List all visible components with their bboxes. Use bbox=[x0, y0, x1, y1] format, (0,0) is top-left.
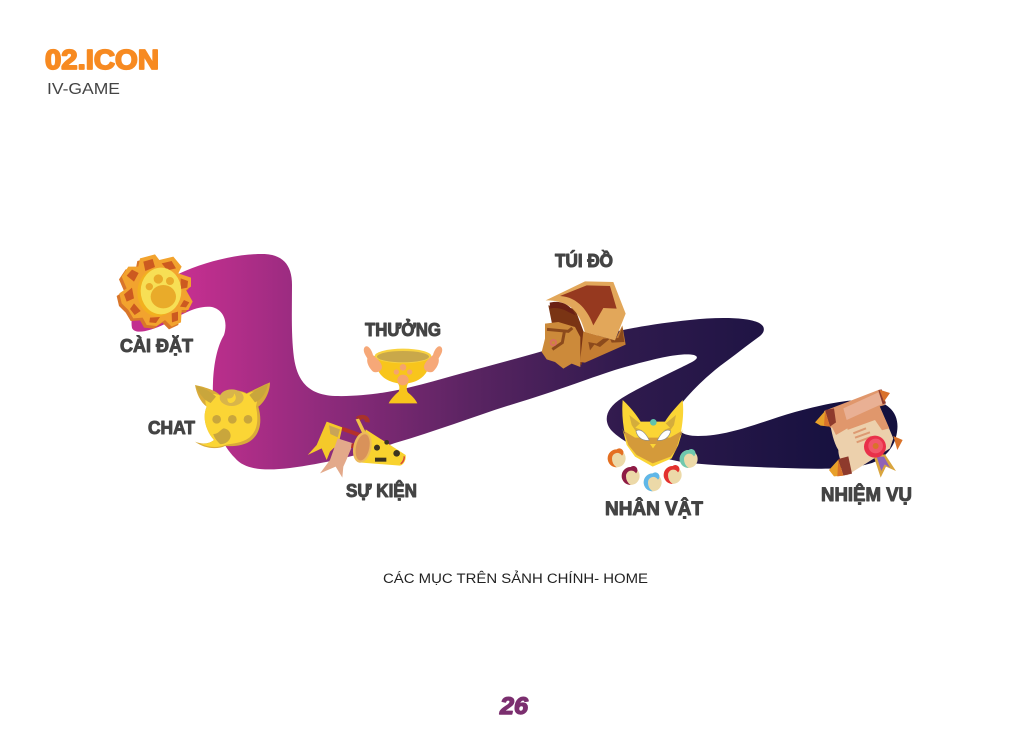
label: quest: NHIỆM VỤ bbox=[821, 484, 912, 506]
label: settings: CÀI ĐẶT bbox=[120, 335, 193, 356]
label: event: SỰ KIỆN bbox=[346, 480, 417, 501]
subtitle: IV-GAME bbox=[47, 81, 120, 98]
title: 02.ICON bbox=[45, 44, 159, 75]
label: reward: THƯỞNG bbox=[365, 319, 441, 340]
page number: 26 bbox=[499, 693, 529, 720]
icon: chat cat bbox=[195, 382, 270, 448]
icon: event megaphone with flags bbox=[308, 415, 406, 478]
icon: quest scroll with ribbon bbox=[815, 389, 903, 478]
icon: treasure chest bag bbox=[542, 281, 626, 369]
label: character: NHÂN VẬT bbox=[605, 498, 703, 520]
label: chat: CHAT bbox=[148, 418, 195, 438]
icon: trophy cup bbox=[364, 346, 442, 403]
winding ribbon path bbox=[132, 254, 897, 469]
icon: settings gear with paw bbox=[117, 254, 193, 329]
caption: CÁC MỤC TRÊN SẢNH CHÍNH- HOME bbox=[383, 571, 648, 586]
label: bag: TÚI ĐỒ bbox=[555, 250, 613, 271]
icon: character cat mask with orbs bbox=[608, 400, 698, 491]
